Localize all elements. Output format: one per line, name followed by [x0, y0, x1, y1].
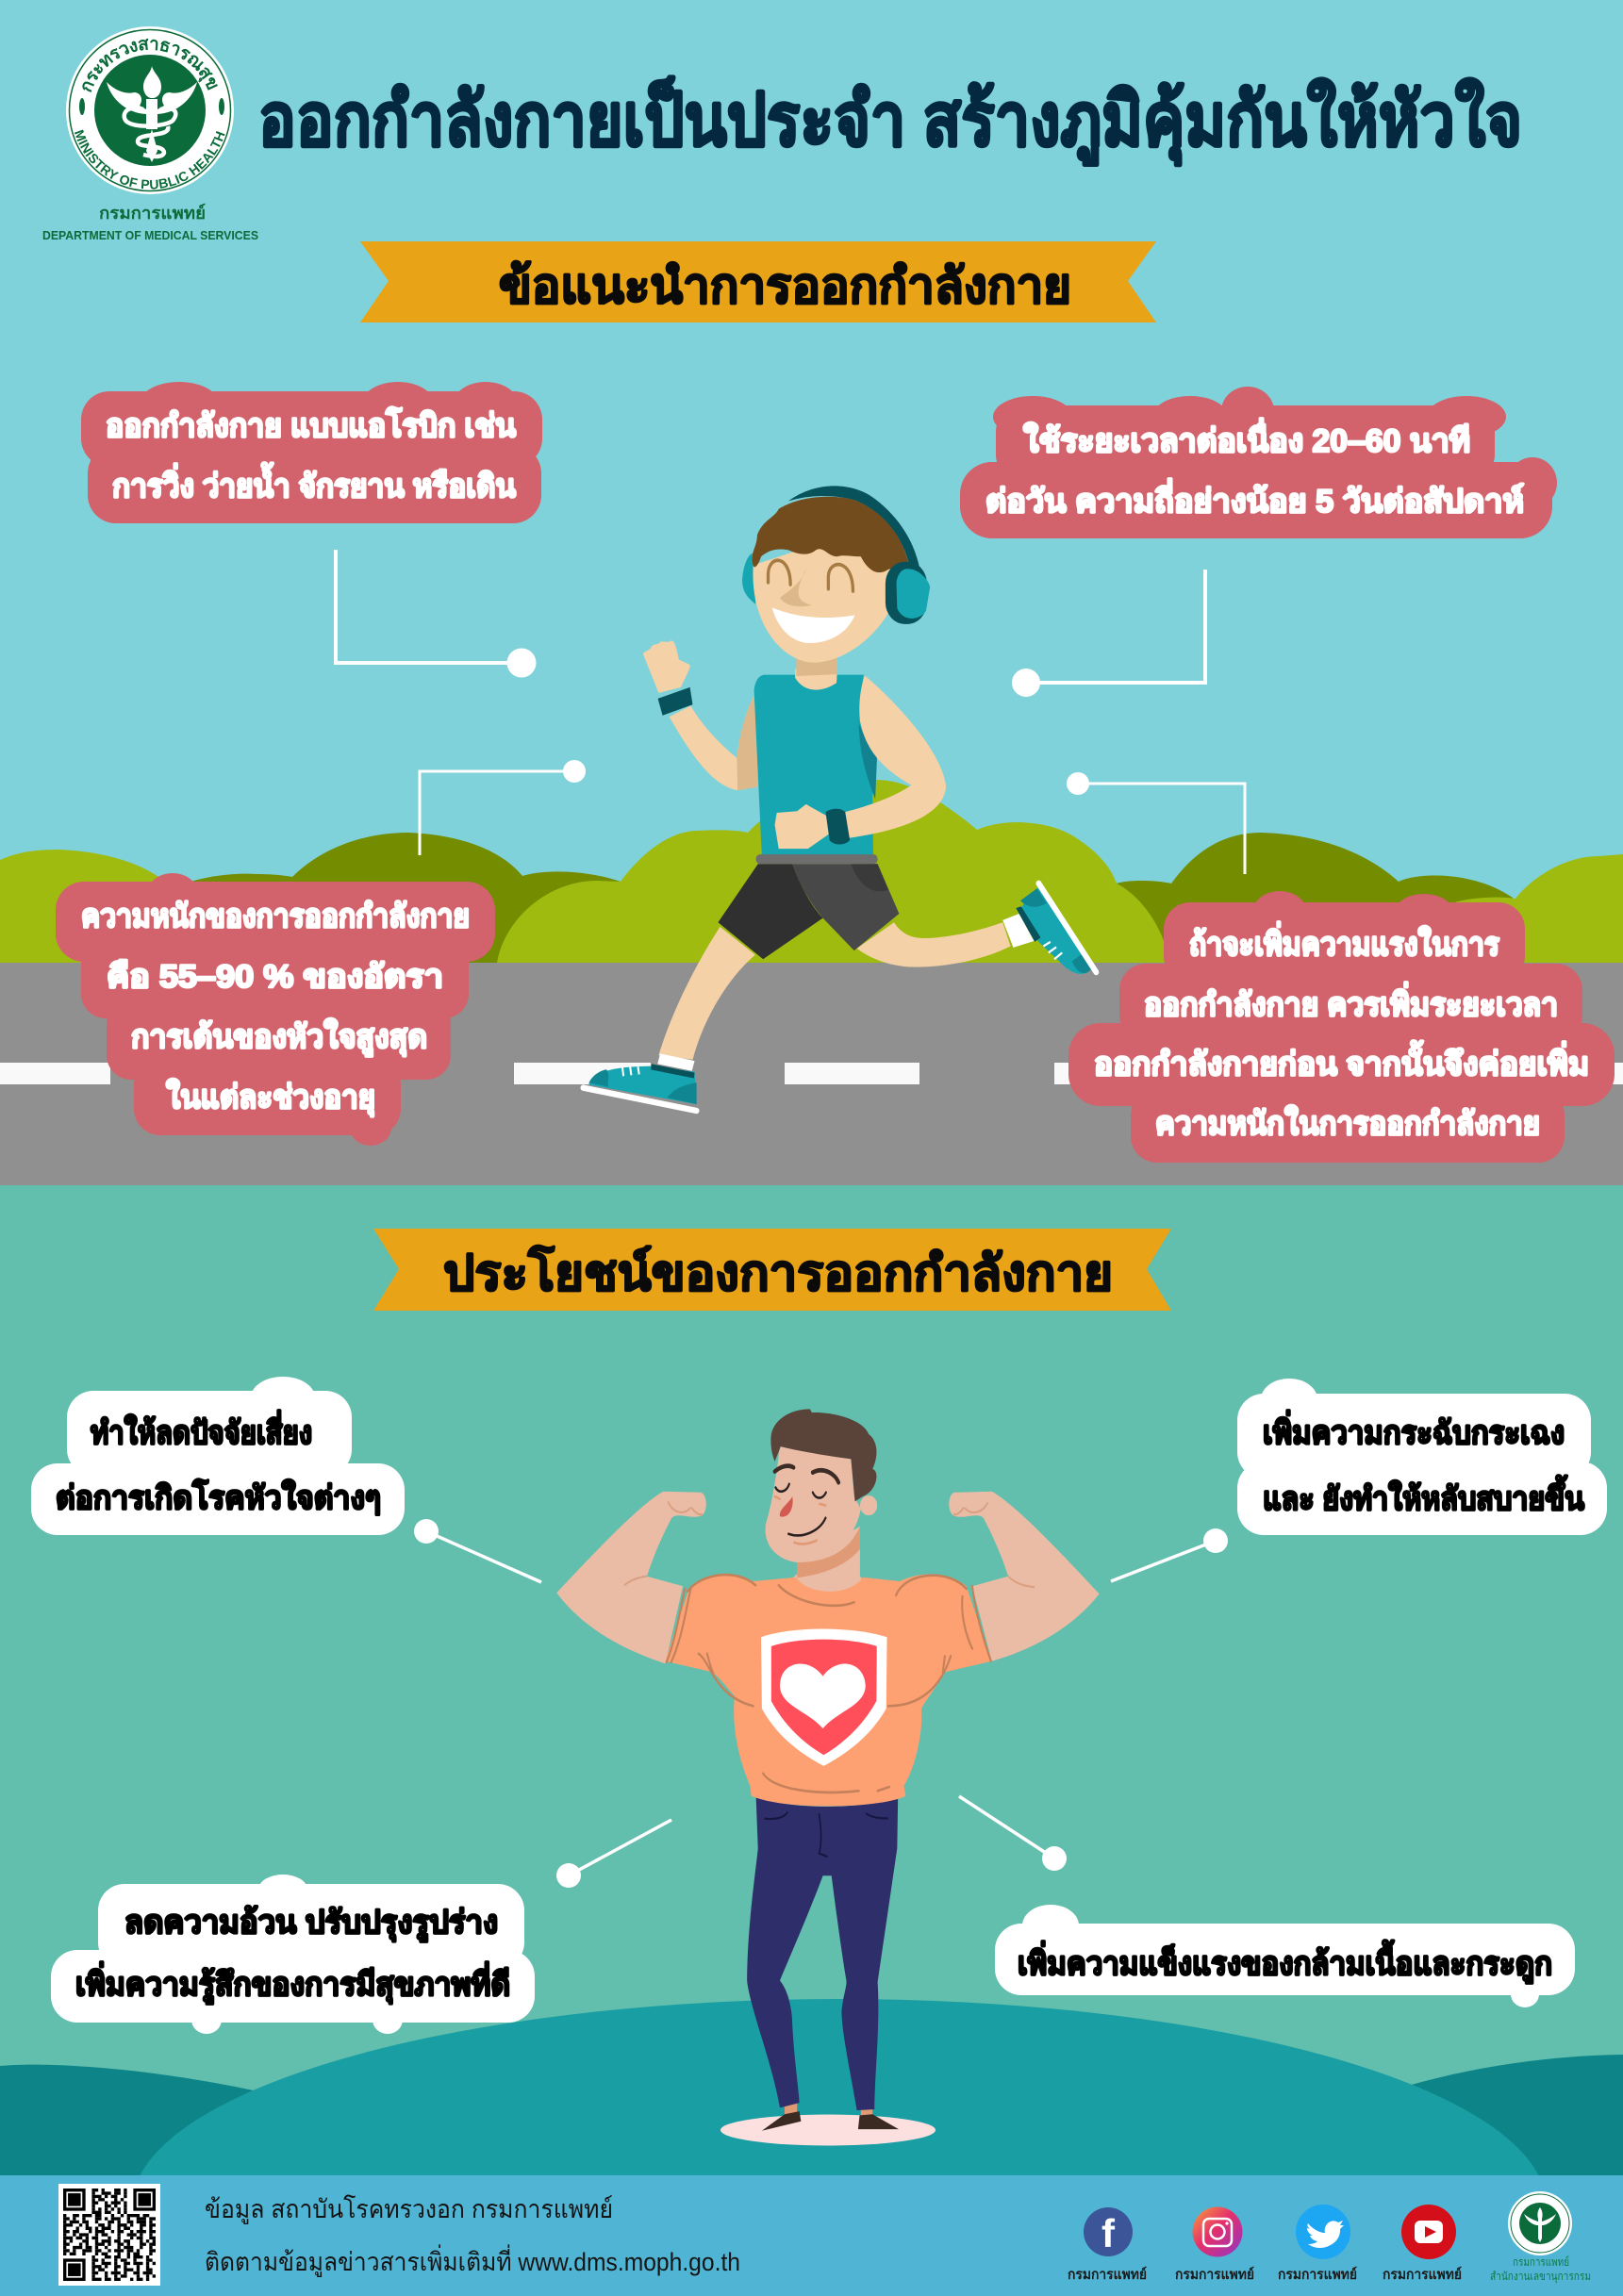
banner: benefits of exercise: ประโยชน์ของการออกกำลังกาย [443, 1244, 1113, 1301]
banner: exercise advice: ข้อแนะนำการออกกำลังกาย [499, 259, 1071, 314]
icon: instagram [1192, 2206, 1243, 2257]
social media labels: กรมการแพทย์ [1175, 2266, 1254, 2283]
callout: aerobic exercise: ออกกำลังกาย แบบแอโรบิก เช่น [106, 406, 516, 444]
callout: intensity: คือ 55–90 % ของอัตรา [107, 959, 443, 995]
department name [42, 203, 258, 242]
footer logo caption [1490, 2255, 1591, 2284]
callout: reduce heart disease risk [31, 1377, 405, 1535]
callout: reduce heart disease risk: ทำให้ลดปัจจัยเสี่ยง [91, 1410, 312, 1451]
runner tank top [754, 675, 877, 857]
callout: energy and sleep: และ ยังทำให้หลับสบายขึ้น [1263, 1475, 1584, 1517]
sky background [0, 0, 1623, 963]
runner back arm [643, 641, 758, 790]
callout: duration and frequency [960, 387, 1557, 538]
icon: youtube [1401, 2205, 1456, 2259]
connector line: top left benefit [414, 1519, 541, 1582]
callout: duration and frequency: ต่อวัน ความถี่อย่างน้อย 5 วันต่อสัปดาห์ [985, 478, 1524, 520]
callout: aerobic exercise: การวิ่ง ว่ายน้ำ จักรยาน หรือเดิน [112, 462, 516, 504]
department name: กรมการแพทย์ [99, 203, 206, 223]
connector line: intensity [420, 760, 586, 855]
connector line: increase strength [1067, 772, 1245, 874]
runner front arm [775, 675, 946, 849]
icon: twitter [1296, 2205, 1350, 2259]
hills and bushes [0, 780, 1623, 963]
footer text: source: ข้อมูล สถาบันโรคทรวงอก กรมการแพทย์ [205, 2194, 613, 2224]
social media labels: กรมการแพทย์ [1278, 2266, 1357, 2283]
social media labels: กรมการแพทย์ [1068, 2266, 1147, 2283]
callout: muscle and bone strength: เพิ่มความแข็งแรงของกล้ามเนื้อและกระดูก [1018, 1940, 1552, 1984]
header logo: Ministry of Public Health: กระทรวงสาธารณสุข [82, 38, 218, 92]
runner legs [657, 914, 1034, 1071]
callout: intensity [56, 873, 495, 1146]
icon: facebook [1084, 2207, 1133, 2256]
callout: increasing strength [1068, 891, 1615, 1163]
muscular man illustration [556, 1409, 1100, 2131]
runner illustration [583, 486, 1096, 1111]
connector line: top right benefit [1111, 1528, 1228, 1581]
man head [766, 1409, 877, 1562]
man jeans [747, 1797, 898, 2110]
callout: energy and sleep: เพิ่มความกระฉับกระเฉง [1263, 1410, 1565, 1451]
callout: weight loss [51, 1875, 535, 2034]
callout: weight loss: ลดความอ้วน ปรับปรุงรูปร่าง [124, 1905, 498, 1942]
header logo: Ministry of Public Health: MINISTRY OF PUBLIC HEALTH [75, 130, 224, 190]
social media labels [1068, 2266, 1462, 2283]
runner front shoe [583, 1064, 697, 1111]
man feet [762, 2103, 899, 2131]
road dashes [0, 1063, 1623, 1084]
callout: energy and sleep [1237, 1379, 1607, 1535]
runner neck [795, 656, 837, 690]
lower section background [0, 1185, 1623, 2176]
icon: facebook: f [1101, 2211, 1116, 2255]
callout: aerobic exercise [81, 382, 542, 523]
callout: weight loss: เพิ่มความรู้สึกของการมีสุขภาพที่ดี [75, 1961, 510, 2005]
footer text: more information: ติดตามข้อมูลข่าวสารเพิ่มเติมที่ www.dms.moph.go.th [205, 2244, 740, 2277]
man t-shirt [665, 1574, 992, 1807]
banner: benefits of exercise [373, 1229, 1171, 1311]
department name: DEPARTMENT OF MEDICAL SERVICES [42, 229, 258, 242]
connector line: bottom left benefit [556, 1820, 671, 1888]
ground hills [0, 1999, 1623, 2176]
connector line: duration [1012, 570, 1205, 697]
connector line: bottom right benefit [959, 1796, 1067, 1871]
header logo: Ministry of Public Health [66, 26, 234, 194]
footer band [0, 2175, 1623, 2296]
callout: increasing strength: ถ้าจะเพิ่มความแรงในการ [1189, 921, 1500, 963]
callout: muscle and bone strength [995, 1905, 1575, 2007]
callout: increasing strength: ความหนักในการออกกำลังกาย [1155, 1104, 1540, 1142]
callout: reduce heart disease risk: ต่อการเกิดโรคหัวใจต่างๆ [56, 1478, 381, 1516]
callout: increasing strength: ออกกำลังกายก่อน จากนั้นจึงค่อยเพิ่ม [1094, 1040, 1589, 1082]
callout: intensity: การเต้นของหัวใจสูงสุด [131, 1017, 427, 1057]
man arms [556, 1492, 1100, 1663]
shadow ellipse under man [720, 2114, 936, 2146]
runner back shoe [1016, 884, 1096, 974]
runner head [742, 486, 930, 663]
callout: increasing strength: ออกกำลังกาย ควรเพิ่มระยะเวลา [1144, 982, 1558, 1023]
callout: intensity: ความหนักของการออกกำลังกาย [81, 899, 470, 934]
banner: exercise advice [360, 241, 1156, 322]
footer logo caption: สำนักงานเลขานุการกรม [1490, 2270, 1591, 2284]
callout: duration and frequency: ใช้ระยะเวลาต่อเนื่อง 20–60 นาที [1023, 418, 1470, 459]
footer logo caption: กรมการแพทย์ [1513, 2255, 1569, 2269]
man neck [787, 1527, 869, 1597]
footer logo [1508, 2191, 1572, 2255]
runner shorts [718, 854, 899, 959]
road [0, 963, 1623, 1185]
connector line: aerobic exercise [336, 550, 536, 677]
shield with heart on shirt [761, 1629, 887, 1766]
QR code [58, 2184, 160, 2286]
social media labels: กรมการแพทย์ [1383, 2266, 1462, 2283]
callout: intensity: ในแต่ละช่วงอายุ [166, 1078, 375, 1117]
